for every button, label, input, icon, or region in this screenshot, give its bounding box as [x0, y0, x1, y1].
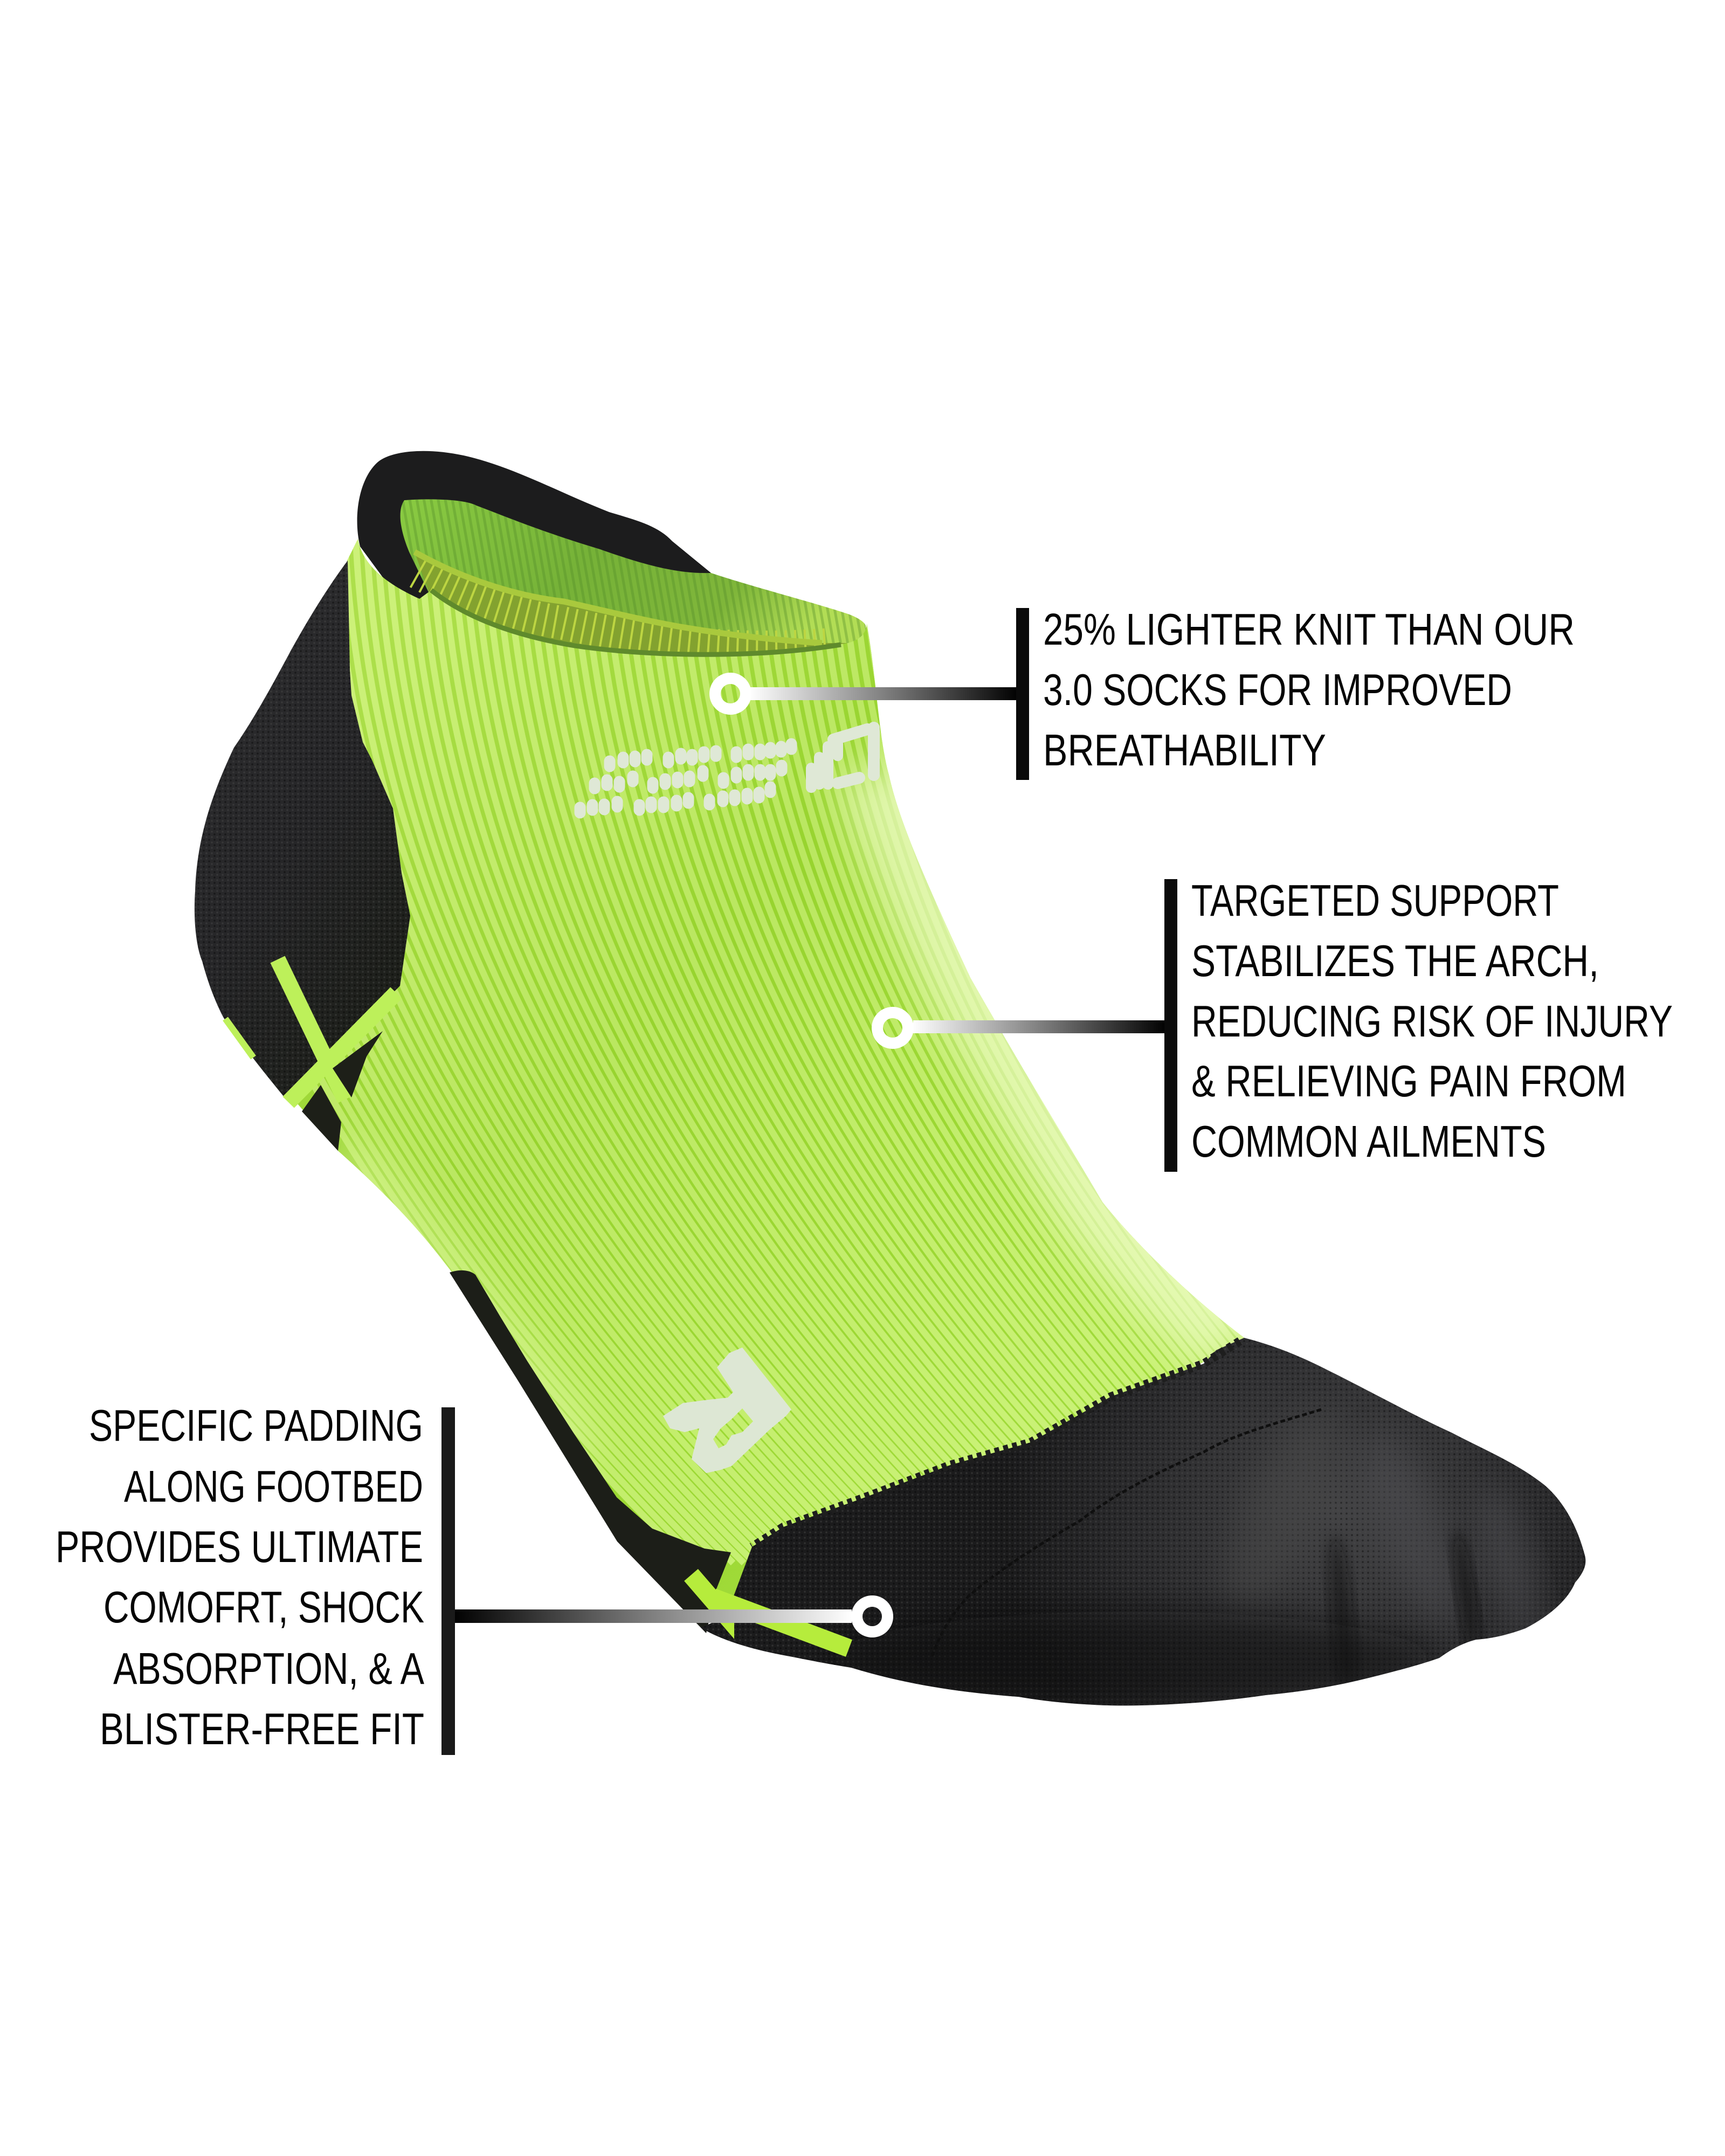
black heel patch	[333, 1031, 383, 1097]
toe cap	[701, 1337, 1586, 1705]
marker ring 1	[715, 678, 746, 709]
text: padding: SPECIFIC PADDING	[89, 1400, 423, 1450]
callout: lighter knit	[715, 604, 1575, 780]
text: lighter knit: 3.0 SOCKS FOR IMPROVED	[1043, 665, 1512, 715]
knit logo	[580, 728, 874, 813]
black heel patch lower	[302, 1085, 341, 1151]
leader line 1	[750, 687, 1017, 700]
vertical bar 3	[441, 1407, 455, 1755]
text: lighter knit	[1043, 604, 1575, 775]
text: padding: BLISTER-FREE FIT	[100, 1704, 424, 1754]
marker ring 2	[878, 1012, 908, 1044]
text: padding: ALONG FOOTBED	[124, 1461, 423, 1511]
sock inner lining	[400, 499, 866, 644]
text: arch support: & RELIEVING PAIN FROM	[1191, 1056, 1626, 1106]
stitched hem band	[415, 552, 848, 679]
callout: arch support	[878, 875, 1673, 1172]
text: lighter knit: 25% LIGHTER KNIT THAN OUR	[1043, 604, 1575, 654]
green knit body	[224, 539, 1244, 1595]
marker ring 3	[857, 1601, 887, 1632]
text: padding: COMOFRT, SHOCK	[104, 1582, 424, 1632]
text: arch support: TARGETED SUPPORT	[1191, 875, 1559, 925]
sock heel tab	[357, 451, 711, 606]
text: arch support: STABILIZES THE ARCH,	[1191, 936, 1599, 986]
toe border knit edge	[752, 1341, 1240, 1547]
vertical bar 2	[1164, 879, 1177, 1172]
callout: padding	[56, 1400, 887, 1755]
text: arch support	[1191, 875, 1673, 1166]
toe seam	[932, 1409, 1321, 1658]
green sole stripe	[691, 1575, 849, 1648]
sole strip	[450, 1270, 731, 1633]
sock illustration	[151, 451, 1617, 1725]
text: padding	[56, 1400, 425, 1754]
text: lighter knit: BREATHABILITY	[1043, 725, 1326, 775]
leader line 2	[913, 1020, 1165, 1033]
heel edge sliver	[225, 1019, 253, 1058]
sock heel	[195, 561, 410, 1151]
vertical bar 1	[1016, 608, 1029, 780]
leader line 3	[452, 1609, 852, 1623]
text: arch support: COMMON AILMENTS	[1191, 1116, 1546, 1166]
heel X mark	[278, 959, 396, 1102]
knit R mark	[663, 1348, 791, 1473]
text: padding: ABSORPTION, & A	[113, 1643, 425, 1694]
text: padding: PROVIDES ULTIMATE	[56, 1522, 423, 1572]
